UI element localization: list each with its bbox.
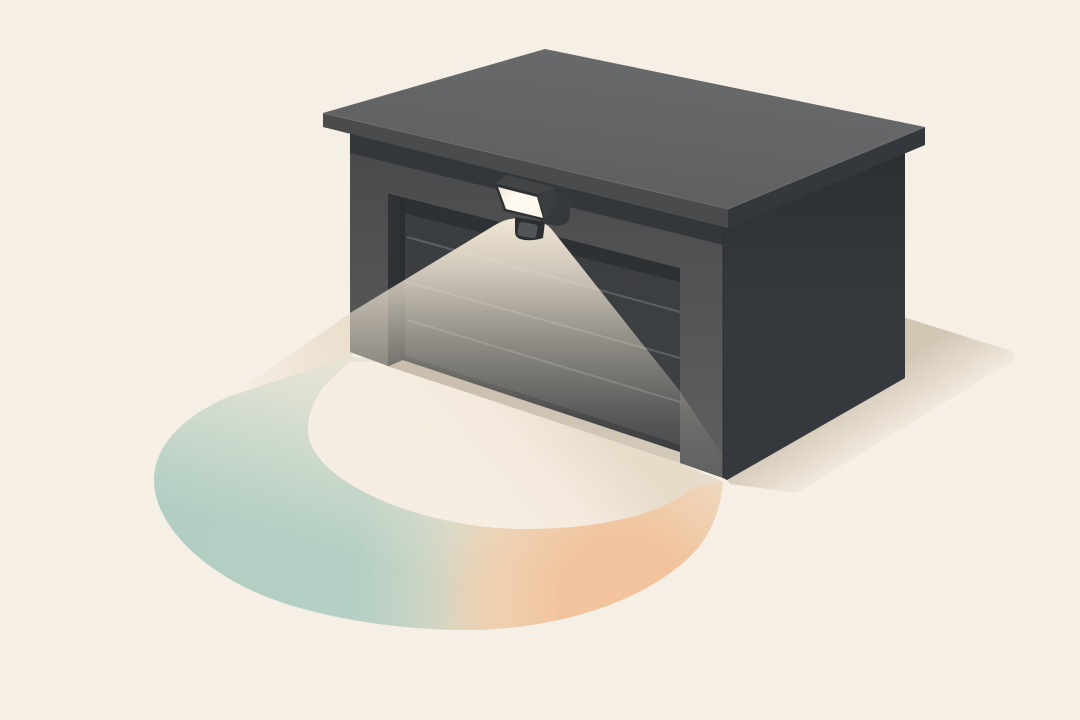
door panel lines — [407, 237, 680, 402]
housing side — [537, 188, 555, 221]
garage building — [323, 49, 925, 480]
door bottom edge — [403, 355, 680, 452]
roof fascia front — [323, 113, 728, 228]
door panel — [403, 197, 680, 452]
shadow under roof fascia — [350, 128, 723, 245]
ground shadow of garage — [720, 316, 1015, 492]
roof fascia side — [728, 127, 925, 228]
wall corner line — [722, 228, 724, 478]
garage door — [388, 193, 680, 452]
right side wall — [723, 148, 905, 480]
door top shadow — [388, 193, 680, 282]
sensor body — [515, 217, 545, 240]
door sill shadow — [387, 360, 680, 463]
sensor lens — [517, 222, 538, 239]
roof edge highlight — [323, 113, 925, 209]
mount shadow — [540, 190, 570, 226]
outer pool: teal to cream gradient — [154, 357, 723, 630]
motion sensor — [515, 217, 545, 240]
front wall — [350, 128, 723, 478]
roof top — [323, 49, 925, 209]
housing top — [494, 175, 555, 194]
light beam wedge on floor — [226, 312, 352, 399]
floodlight fixture — [494, 175, 570, 240]
pool fade overlay — [154, 357, 723, 630]
inner bright zone — [308, 362, 723, 529]
door left edge — [400, 199, 405, 360]
peach glow — [154, 357, 723, 630]
door recess jamb — [388, 193, 403, 366]
roof — [323, 49, 925, 228]
light pool on driveway — [154, 357, 723, 630]
lens — [498, 187, 543, 218]
housing front — [494, 183, 545, 221]
light cone on door and wall — [350, 218, 723, 478]
